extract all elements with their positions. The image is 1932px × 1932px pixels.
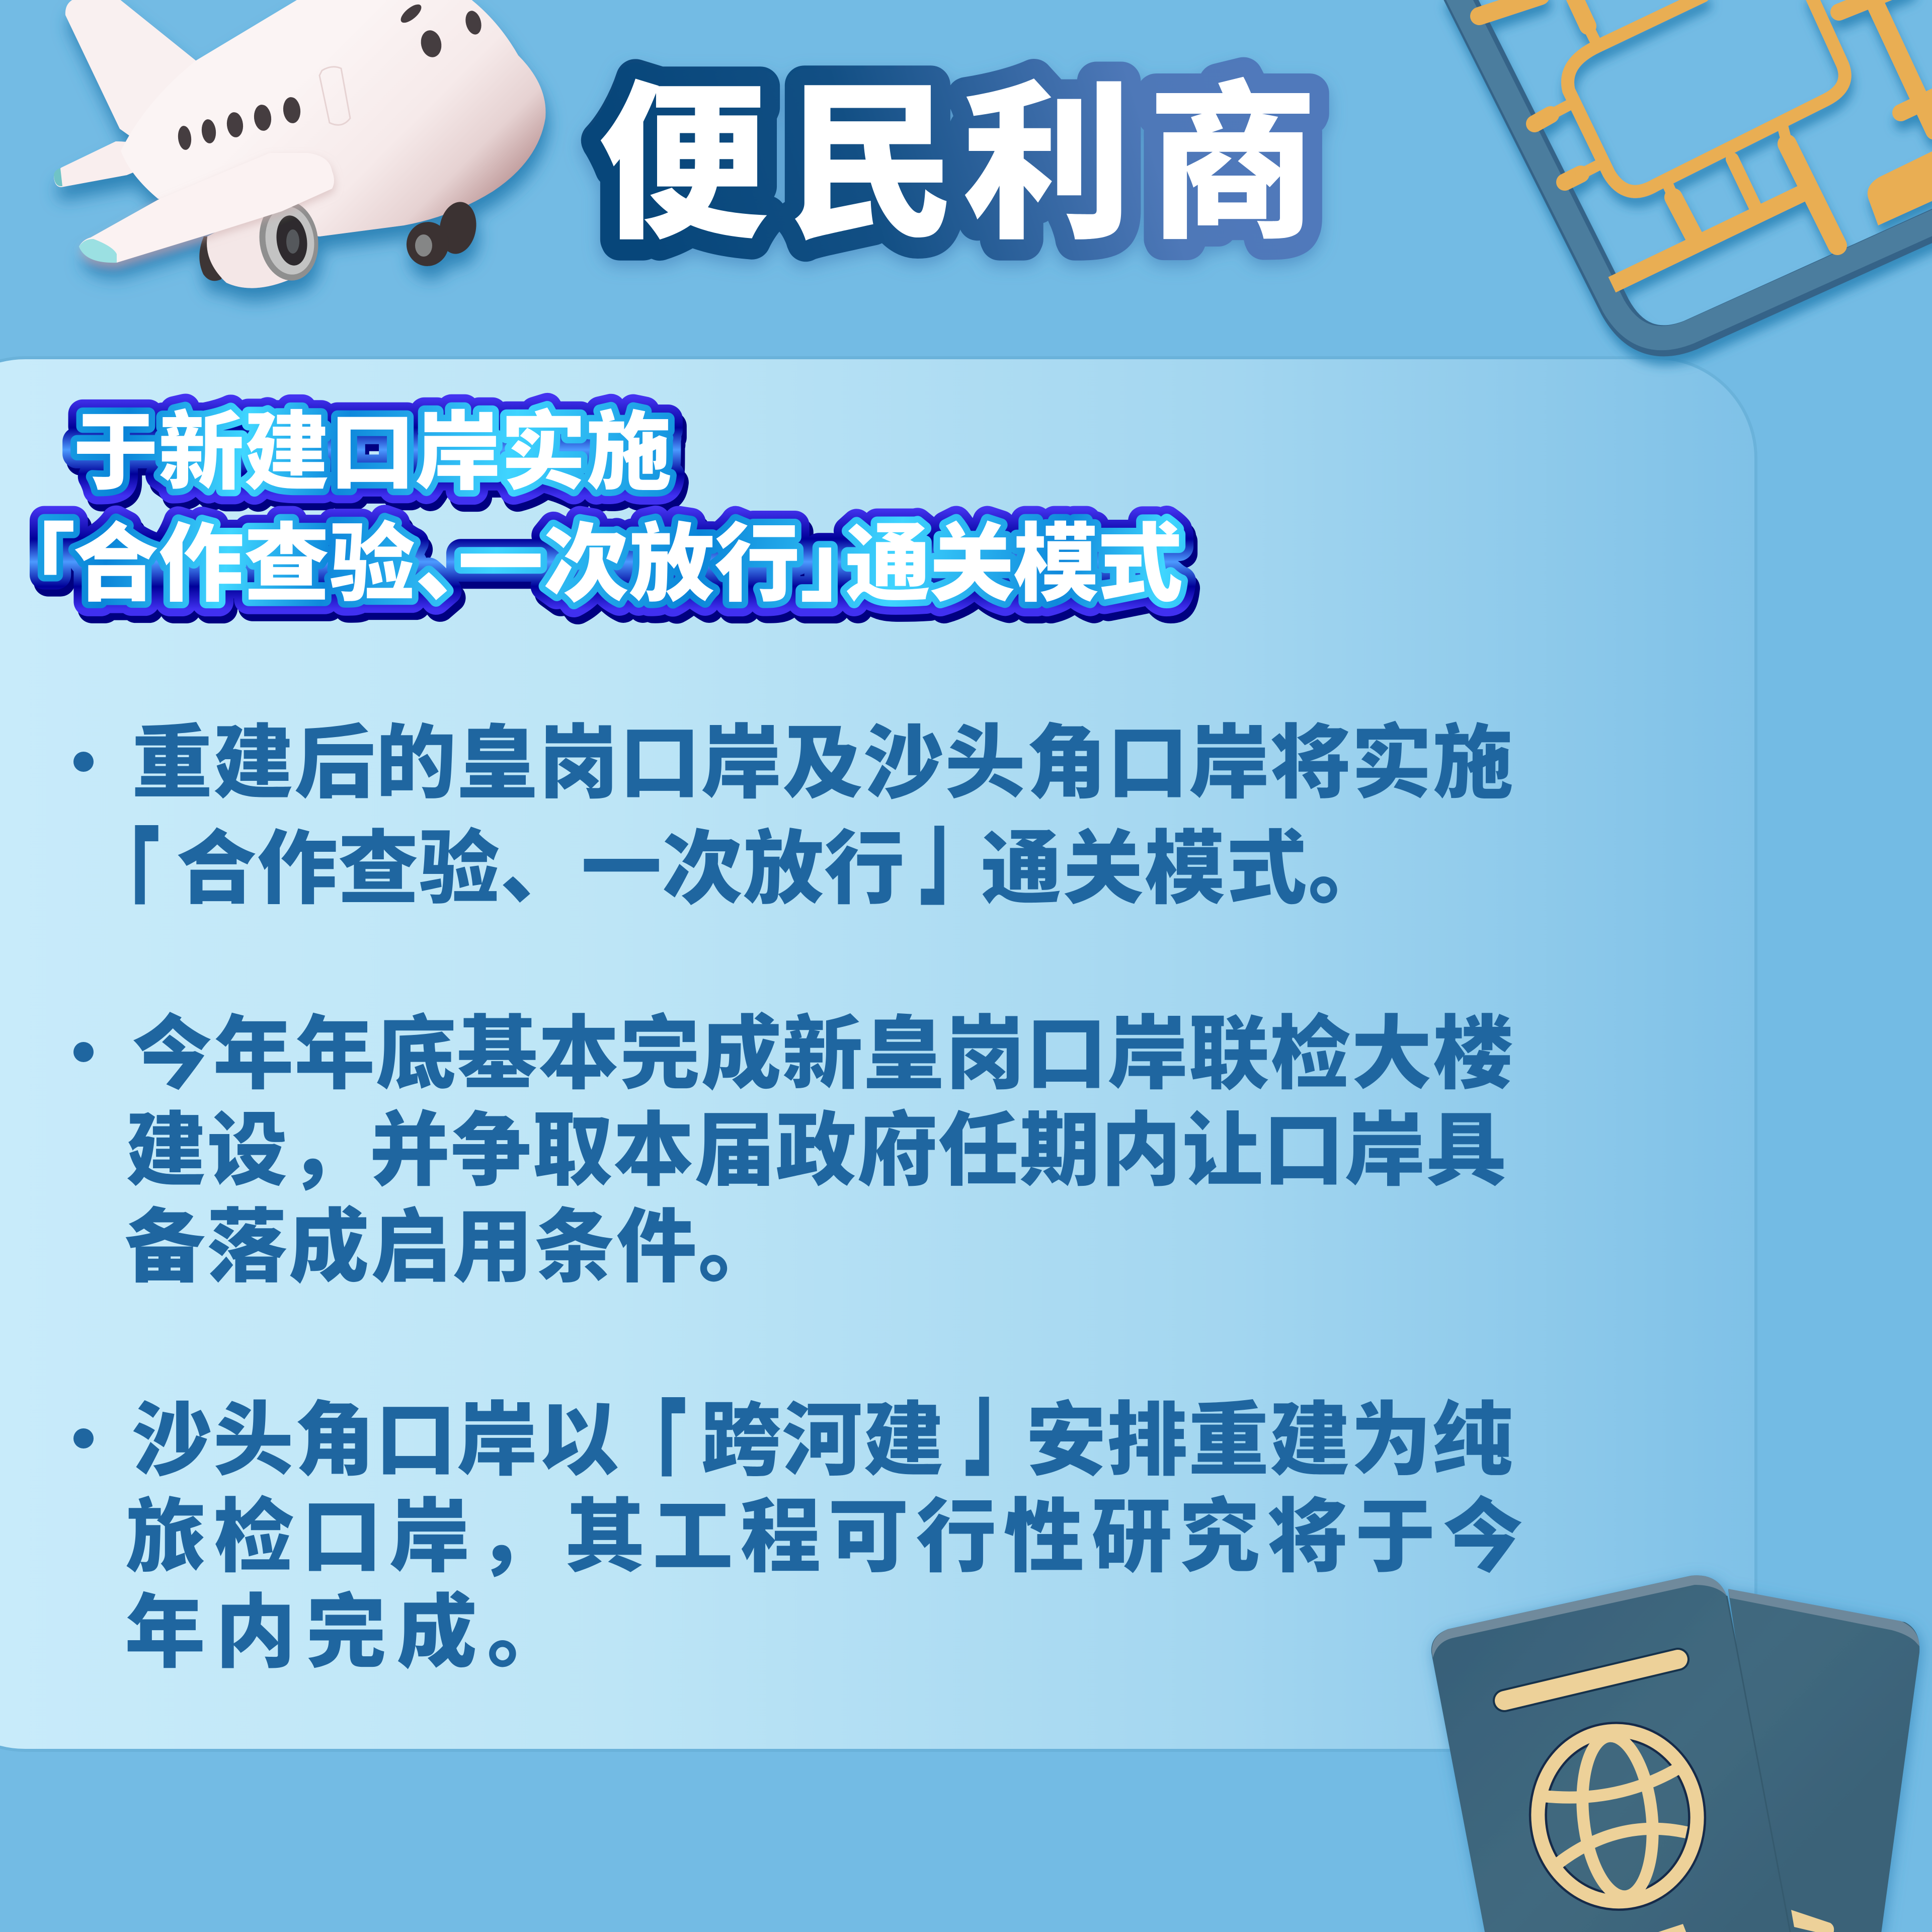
globe emblem — [1530, 1723, 1706, 1910]
bullet text line two: 旅检口岸，其工程可行性研究将于今 — [126, 1492, 1531, 1582]
sprue frame — [1456, 0, 1932, 341]
cockpit windows — [398, 2, 484, 59]
panel: main content card — [0, 358, 1756, 1750]
heading one inner outline: 于新建口岸实施 — [73, 405, 672, 501]
passport title bar — [1504, 1659, 1678, 1701]
bullet text line three: 备落成启用条件。 — [125, 1202, 780, 1292]
bullet text line two — [92, 781, 1390, 958]
bullet text line two: 合作查验、一次放行 — [176, 824, 905, 914]
main wing — [79, 153, 334, 263]
heading two inner outline: 「合作查验、一次放行」通关模式 — [0, 517, 1183, 612]
heading one face: 于新建口岸实施 — [73, 405, 672, 501]
title — [598, 69, 1318, 262]
title extrusion: 便民利商 — [598, 72, 1318, 262]
heading two face: 「合作查验、一次放行」通关模式 — [0, 517, 1183, 612]
icon: model kit sprue — [1455, 0, 1932, 341]
bullet text line two: 建设，并争取本届政府任期内让口岸具 — [126, 1105, 1507, 1195]
bullet text line one: 安排重建为纯 — [1026, 1395, 1513, 1485]
bullet text line two: 「 — [92, 820, 160, 958]
bullet text line one: 「 — [618, 1392, 687, 1531]
heading one outer outline: 于新建口岸实施 — [73, 405, 672, 501]
bullet block one — [73, 718, 1514, 958]
orange gate pad — [1868, 149, 1932, 225]
landing gear — [403, 199, 480, 270]
title face: 便民利商 — [598, 69, 1318, 260]
bullet dot — [73, 1428, 94, 1448]
bullet text line one — [132, 1352, 1513, 1531]
rear stabilizer — [54, 141, 152, 187]
bullet block three — [73, 1352, 1531, 1677]
bullet dot — [73, 752, 94, 772]
bullet text line one: 重建后的皇岗口岸及沙头角口岸将实施 — [132, 718, 1514, 808]
front passport — [1431, 1575, 1791, 1932]
bullet text line one: 跨河建 — [701, 1395, 945, 1485]
heading: line one — [73, 405, 676, 508]
cabin windows — [177, 96, 302, 150]
bullet block two — [73, 1009, 1514, 1292]
bullet text line three: 年内完成。 — [125, 1587, 578, 1677]
engine — [199, 197, 324, 288]
bullet text line one: 」 — [964, 1352, 1032, 1491]
fuselage — [121, 0, 546, 236]
heading two outer outline: 「合作查验、一次放行」通关模式 — [0, 517, 1183, 612]
icon: airplane — [54, 0, 546, 288]
heading one shadow: 于新建口岸实施 — [77, 412, 676, 508]
back passport — [1728, 1589, 1919, 1932]
title outline: 便民利商 — [598, 69, 1318, 260]
orange runners — [1479, 0, 1932, 285]
bullet dot — [73, 1042, 94, 1062]
icon: passports — [1431, 1575, 1919, 1932]
bullet text line two: 」 — [919, 781, 988, 920]
tail fin — [65, 0, 199, 151]
bullet text line two: 通关模式。 — [981, 824, 1390, 914]
cabin door — [319, 67, 350, 125]
heading: line two — [0, 517, 1187, 619]
heading two shadow: 「合作查验、一次放行」通关模式 — [0, 524, 1187, 619]
bullet text line one: 今年年底基本完成新皇岗口岸联检大楼 — [132, 1009, 1514, 1099]
bullet text line one: 沙头角口岸以 — [132, 1395, 619, 1485]
